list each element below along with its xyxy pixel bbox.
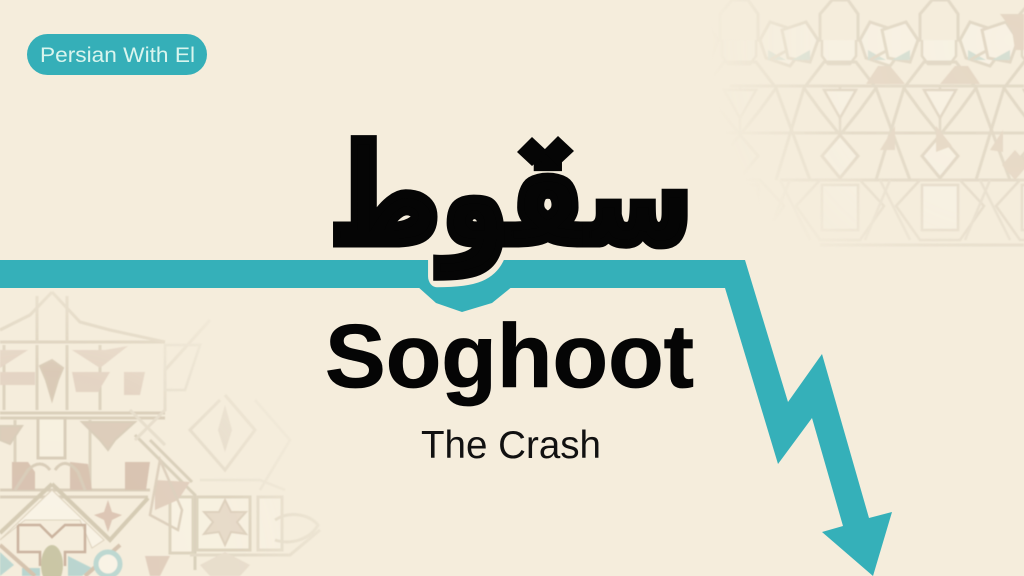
- Persian word: سقوط: [329, 118, 693, 276]
- transliteration: Soghoot: Soghoot: [325, 307, 694, 407]
- translation: The Crash: The Crash: [421, 424, 601, 467]
- crash arrow: [0, 260, 892, 576]
- Persian word: سقوط: [329, 118, 693, 276]
- decorative pattern: top right: [759, 0, 1024, 246]
- badge: Persian With El: Persian With El: [40, 44, 195, 67]
- badge: Persian With El: [27, 34, 207, 75]
- decorative pattern: bottom left: [0, 292, 320, 576]
